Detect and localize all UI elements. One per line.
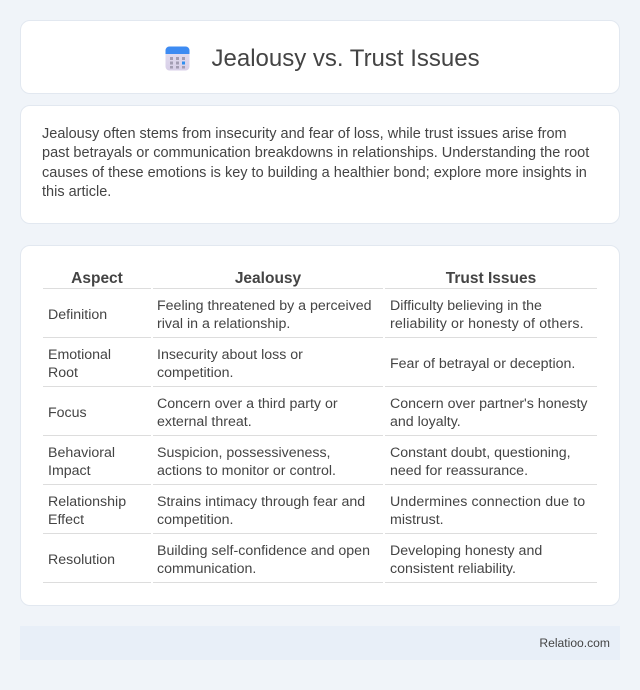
- icon: calendar: [166, 46, 190, 70]
- row: Behavioral Impact: actions to monitor or control.: [157, 463, 336, 479]
- row: Behavioral Impact: Suspicion, possessiveness,: [157, 445, 330, 461]
- row: Definition: rival in a relationship.: [157, 316, 290, 332]
- row: Emotional Root: Root: [48, 365, 78, 381]
- row: Relationship Effect: competition.: [157, 512, 234, 528]
- row: Focus: and loyalty.: [390, 414, 461, 430]
- row: Resolution: Resolution: [48, 552, 115, 568]
- row: Resolution: Developing honesty and: [390, 543, 542, 559]
- row: Emotional Root: Fear of betrayal or deception.: [390, 356, 575, 372]
- row: Resolution: Building self-confidence and open: [157, 543, 370, 559]
- row: Focus: [48, 396, 588, 430]
- row: Relationship Effect: Undermines connection due to: [390, 494, 585, 510]
- row: Behavioral Impact: Constant doubt, questioning,: [390, 445, 571, 461]
- header card: [20, 20, 620, 94]
- row: Emotional Root: [48, 347, 575, 381]
- row: Focus: Focus: [48, 405, 87, 421]
- row: Focus: external threat.: [157, 414, 252, 430]
- row: Emotional Root: Insecurity about loss or: [157, 347, 303, 363]
- row: Relationship Effect: mistrust.: [390, 512, 444, 528]
- row: Relationship Effect: Strains intimacy through fear and: [157, 494, 365, 510]
- row: Resolution: consistent reliability.: [390, 561, 516, 577]
- title: Jealousy vs. Trust Issues: [212, 45, 480, 72]
- row: Definition: Definition: [48, 307, 107, 323]
- row: Behavioral Impact: Impact: [48, 463, 91, 479]
- intro text: this article.: [42, 184, 111, 200]
- intro card: [20, 105, 620, 224]
- intro text: causes of these emotions is key to building a healthier bond; explore more insights in: [42, 165, 587, 181]
- row: Resolution: [48, 543, 542, 577]
- column heading: Jealousy: Jealousy: [235, 270, 301, 287]
- table panel: [20, 245, 620, 606]
- row: Behavioral Impact: Behavioral: [48, 445, 115, 461]
- row: Relationship Effect: Effect: [48, 512, 84, 528]
- row: Focus: Concern over a third party or: [157, 396, 338, 412]
- row: Definition: Feeling threatened by a perceived: [157, 298, 372, 314]
- row: Focus: Concern over partner's honesty: [390, 396, 588, 412]
- row: Emotional Root: Emotional: [48, 347, 111, 363]
- row: Definition: reliability or honesty of others.: [390, 316, 584, 332]
- column heading: Aspect: Aspect: [71, 270, 123, 287]
- row: Behavioral Impact: [48, 445, 571, 479]
- row: Definition: [48, 298, 584, 332]
- column heading: Trust Issues: Trust Issues: [446, 270, 536, 287]
- intro text: past betrayals or communication breakdowns in relationships. Understanding the root: [42, 145, 589, 161]
- row: Resolution: communication.: [157, 561, 256, 577]
- row: Relationship Effect: [48, 494, 585, 528]
- row: Relationship Effect: Relationship: [48, 494, 126, 510]
- intro text: [42, 126, 590, 200]
- row: Definition: Difficulty believing in the: [390, 298, 542, 314]
- row: Emotional Root: competition.: [157, 365, 234, 381]
- intro text: Jealousy often stems from insecurity and fear of loss, while trust issues arise from: [42, 126, 567, 142]
- footer text: Relatioo.com: [539, 636, 610, 650]
- footer bar: [20, 626, 620, 660]
- row: Behavioral Impact: need for reassurance.: [390, 463, 528, 479]
